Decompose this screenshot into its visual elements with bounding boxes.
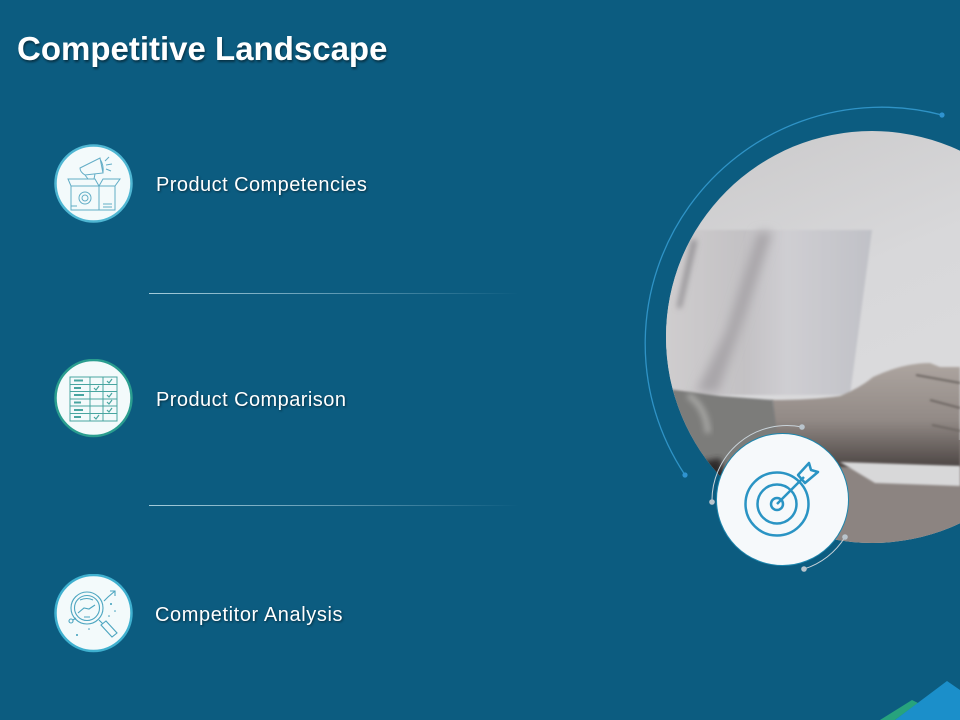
label: Competitor Analysis bbox=[155, 604, 343, 626]
row: product competencies bbox=[54, 144, 368, 223]
photo and target graphic bbox=[644, 106, 960, 720]
divider bbox=[149, 293, 519, 294]
table and paper bbox=[694, 440, 960, 543]
laptop screen bbox=[660, 230, 872, 395]
label: Product Comparison bbox=[156, 389, 346, 411]
title: Competitive Landscape bbox=[17, 30, 387, 67]
arc with dots bbox=[645, 107, 945, 478]
icon: target with arrow bbox=[716, 434, 848, 566]
corner mountains bbox=[880, 681, 960, 720]
row: product comparison bbox=[54, 359, 347, 438]
icon: magnifier with trend bbox=[54, 574, 133, 652]
row: competitor analysis bbox=[54, 574, 344, 652]
hand bbox=[772, 363, 960, 467]
photo: hands at laptop bbox=[660, 125, 960, 550]
icon: comparison table bbox=[54, 359, 133, 438]
sleeve bbox=[672, 388, 776, 466]
icon: megaphone and box bbox=[54, 144, 133, 223]
divider bbox=[149, 505, 519, 506]
paper bbox=[840, 462, 960, 486]
small arcs around target bbox=[709, 424, 848, 572]
label: Product Competencies bbox=[156, 174, 367, 196]
